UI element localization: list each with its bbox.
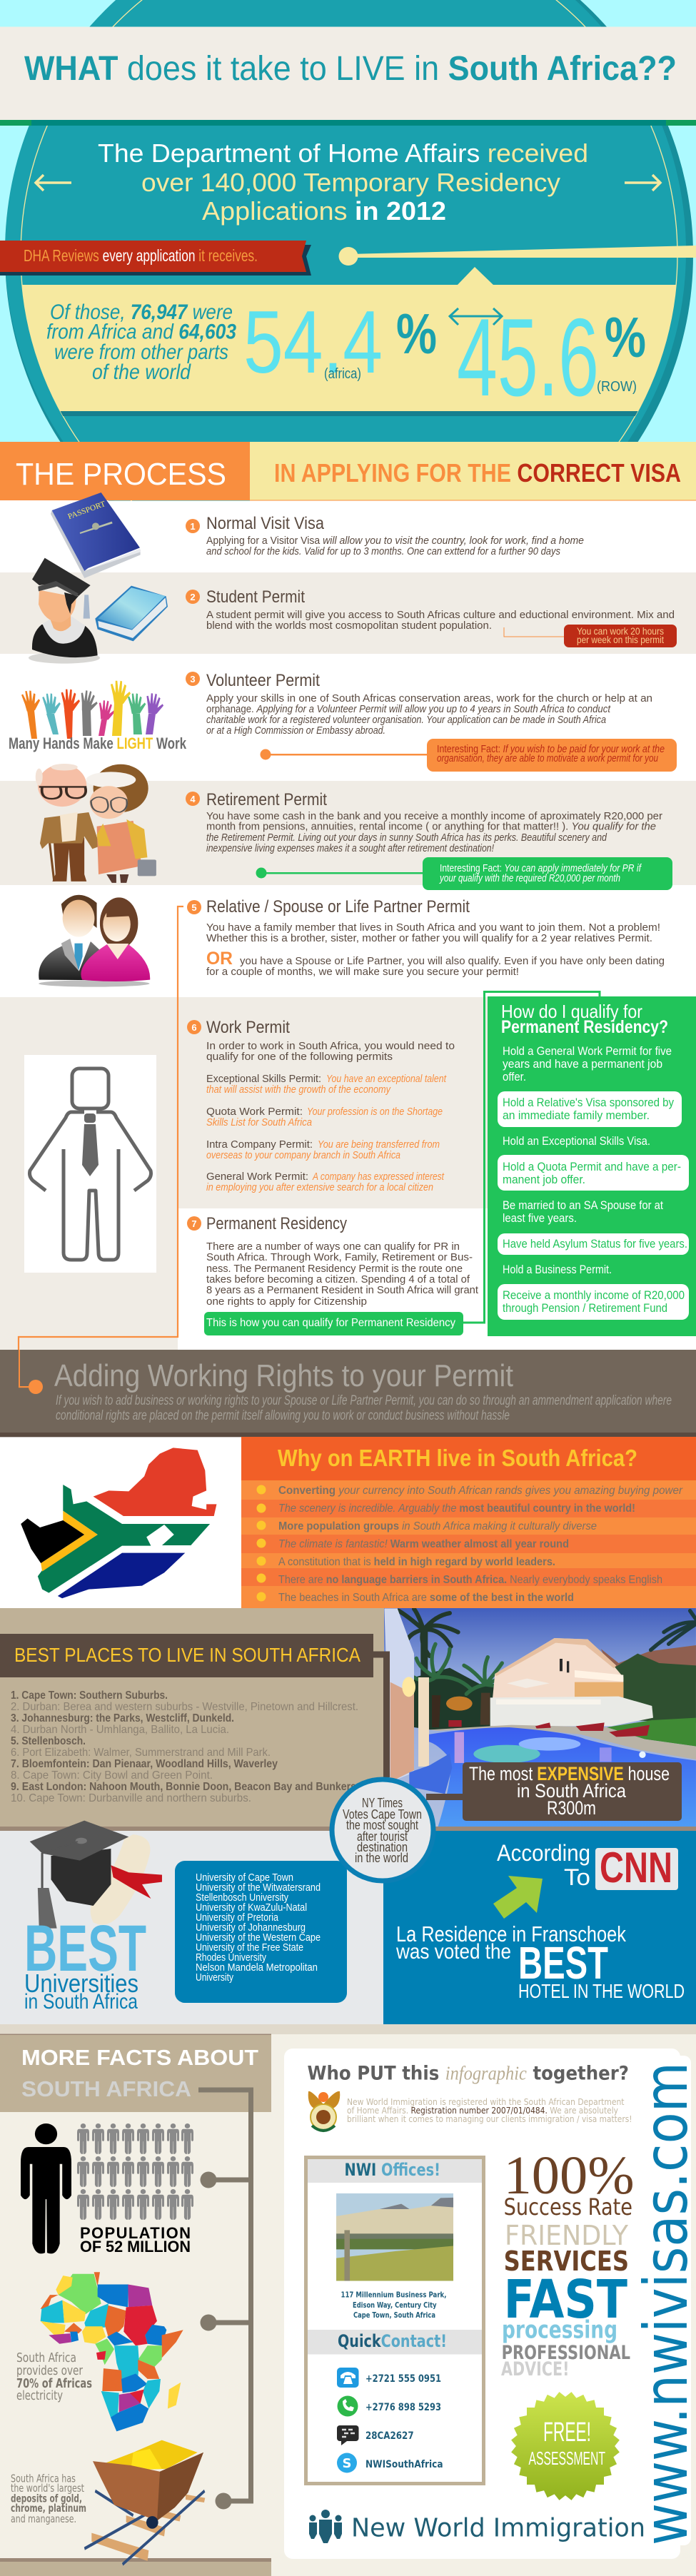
body (206, 535, 584, 557)
heading: Retirement Permit (206, 790, 327, 809)
university list: University of Pretoria (196, 1911, 279, 1924)
text: of those (46, 300, 236, 384)
callout: NY Times: in the world (355, 1851, 408, 1865)
map: africa (41, 2272, 183, 2431)
wordmark: service claims: FAST (504, 2269, 627, 2330)
list: 6. Port Elizabeth: Walmer, Summerstrand and Mill Park. (11, 1747, 271, 1759)
item: exceptional skills: Hold an Exceptional Skills Visa. (503, 1134, 650, 1148)
body: A student permit will give you access to South Africas culture and eductional environment. Mix and (206, 609, 675, 621)
badge 6: 6 (191, 1022, 197, 1033)
label: most expensive house (426, 1762, 682, 1821)
chart: population: POPULATION (80, 2224, 191, 2242)
chart: population: OF 52 MILLION (80, 2238, 191, 2256)
text: la residence: was voted the (395, 1940, 511, 1964)
text: address (341, 2290, 447, 2320)
body: Quota Work Permit: (206, 1106, 303, 1118)
badge 6 (187, 1020, 201, 1034)
body: General Work Permit: (206, 1171, 308, 1183)
step 3: volunteer permit (186, 671, 677, 772)
chart: population (21, 2123, 193, 2256)
text: la residence (395, 1921, 685, 2002)
item: general work permit: offer. (503, 1070, 526, 1084)
badge 4 (186, 792, 200, 806)
panel: statistics (0, 267, 696, 419)
title: WHAT does it take to LIVE in South Africa?? (24, 50, 677, 88)
callout: interesting fact retirement (256, 857, 672, 890)
heading: MORE FACTS ABOUT (21, 2045, 258, 2070)
callout: NY Times: NY Times (362, 1796, 403, 1810)
contact: skype: S (343, 2456, 351, 2471)
headline text (98, 138, 588, 226)
body (206, 1040, 455, 1193)
body: In order to work in South Africa, you would need to (206, 1040, 455, 1052)
item: relative's visa (498, 1091, 682, 1127)
panel heading (501, 1001, 668, 1037)
body: Whether this is a brother, sister, mother or father you will qualify for a 2 year relatives Permit. (206, 932, 652, 944)
heading: Volunteer Permit (206, 671, 320, 690)
university list: University (196, 1971, 233, 1984)
stat: africa: % (396, 302, 437, 365)
badge 7: 7 (191, 1218, 197, 1229)
heading: quick contact (308, 2330, 482, 2354)
text: mineral deposits: chrome, platinum (11, 2502, 86, 2515)
text: of those: from Africa and 64,603 (46, 320, 236, 344)
headline text: over 140,000 Temporary Residency (141, 168, 560, 197)
university list: University of the Witwatersrand (196, 1882, 321, 1894)
heading: SOUTH AFRICA (21, 2076, 191, 2101)
body: Skills List for South Africa (206, 1116, 312, 1128)
body: overseas to your company branch in South Africa (206, 1149, 400, 1161)
arrow: green (493, 1876, 543, 1919)
list (11, 1689, 375, 1804)
icon: worker figure (24, 1055, 156, 1273)
body: Your profession is on the Shortage (307, 1106, 443, 1118)
body: 8 years as a Permanent Resident in South Africa will grant (206, 1284, 479, 1296)
wordmark: service claims: PROFESSIONAL (502, 2342, 630, 2364)
body (206, 810, 662, 854)
reason 1: Converting your currency into South African rands gives you amazing buying power (278, 1485, 683, 1497)
step 5: relative permit (187, 897, 665, 978)
panel: who put this together (284, 2049, 696, 2559)
text: according to (497, 1840, 590, 1890)
callout: how to qualify (204, 1312, 463, 1335)
step 4: retirement permit (186, 790, 672, 890)
text: address: 117 Millennium Business Park, (341, 2290, 447, 2300)
step 6: work permit (187, 1018, 455, 1193)
panel: more facts (0, 2034, 271, 2576)
logo: CNN: CNN (600, 1844, 672, 1891)
panel: according to CNN (383, 1831, 696, 2024)
university list: University of the Western Cape (196, 1931, 321, 1944)
text: according to: To (564, 1864, 590, 1890)
text: according to: According (497, 1840, 590, 1866)
icon: many hands make light work: Many Hands Make LIGHT Work (9, 734, 187, 752)
callout: NY Times: after tourist (357, 1829, 408, 1844)
body: for a couple of months, we will make sure you secure your permit! (206, 966, 519, 978)
text: registration: of Home Affairs. Registration number 2007/01/0484. We are absolutely (347, 2105, 619, 2116)
headline text: The Department of Home Affairs received (98, 138, 588, 168)
arrow: double (450, 308, 502, 325)
item: quota permit: Hold a Quota Permit and have a per- (503, 1160, 681, 1173)
contact: skype: NWISouthAfrica (365, 2459, 443, 2470)
heading: Student Permit (206, 587, 305, 607)
list: 7. Bloemfontein: Dan Pienaar, Woodland Hills, Waverley (11, 1758, 278, 1770)
body (206, 1241, 479, 1308)
icon: gold mine cart (84, 2440, 205, 2565)
icon: passport: PASSPORT (67, 500, 107, 521)
item: monthly income (498, 1284, 689, 1320)
item: quota permit (498, 1155, 689, 1191)
badge 1: 1 (190, 521, 196, 532)
photo: expensive house (378, 1606, 696, 1832)
panel: adding working rights (0, 1350, 696, 1438)
item: general work permit: Hold a General Work Permit for five (503, 1044, 672, 1058)
body: You have some cash in the bank and you receive a monthly income of aproximately R20,000 per (206, 810, 662, 822)
heading (24, 1912, 146, 2014)
heading (21, 2045, 258, 2101)
ribbon: DHA reviews (0, 241, 311, 276)
list: 8. Cape Town: City Bowl and Green Point. (11, 1769, 213, 1782)
text: electricity: South Africa (16, 2350, 76, 2365)
body: Intra Company Permit: (206, 1138, 313, 1151)
university list (175, 1861, 347, 2003)
body: You have a family member that lives in South Africa and you want to join them. Not a problem! (206, 921, 660, 934)
reason 2: The scenery is incredible. Arguably the most beautiful country in the world! (278, 1502, 635, 1515)
body: month from pensions, annuities, rental income ( or anything for that matter!! ). You qualify for the (206, 821, 656, 832)
badge 4: 4 (190, 794, 196, 804)
text: mineral deposits: deposits of gold, (11, 2492, 82, 2505)
icon: passport (51, 493, 141, 578)
panel heading: Permanent Residency? (501, 1017, 668, 1037)
callout: how to qualify: This is how you can qualify for Permanent Residency (206, 1317, 455, 1329)
heading: BEST PLACES TO LIVE IN SOUTH AFRICA (14, 1644, 360, 1666)
step 7: permanent residency (187, 1214, 479, 1335)
contact: whatsapp (337, 2395, 441, 2417)
label: most expensive house: R300m (547, 1797, 596, 1819)
reason 6: There are no language barriers in South Africa. Nearly everybody speaks English (278, 1574, 662, 1586)
item: relative's visa: an immediate family member. (503, 1108, 650, 1122)
badge: free assessment: ASSESSMENT (528, 2448, 605, 2469)
panel: why on earth (241, 1437, 696, 1608)
badge 2 (186, 590, 200, 604)
list: 4. Durban North - Umhlanga, Ballito, La Lucia. (11, 1724, 229, 1736)
pin bar (338, 246, 696, 266)
wordmark: service claims: SERVICES (504, 2246, 629, 2277)
text: electricity: provides over (16, 2363, 83, 2378)
body: in employing you after extensive search for a local citizen (206, 1181, 433, 1193)
contact: whatsapp: +2776 898 5293 (365, 2402, 441, 2413)
wordmark: service claims: Success Rate (504, 2193, 632, 2221)
stat: africa: 54.4 (243, 293, 383, 392)
stat: rest of world: % (605, 305, 646, 369)
panel: row backgrounds (0, 501, 696, 1350)
body: There are a number of ways one can qualify for PR in (206, 1241, 460, 1253)
heading (308, 2159, 482, 2183)
heading: Relative / Spouse or Life Partner Permit (206, 897, 470, 916)
contact: phone: +2721 555 0951 (365, 2373, 441, 2385)
heading: Permanent Residency (206, 1214, 347, 1233)
text: address: Cape Town, South Africa (353, 2310, 435, 2320)
list: 3. Johannesburg: the Parks, Westcliff, Dunkeld. (11, 1712, 234, 1724)
icon: coat of arms (308, 2091, 340, 2131)
university list: Nelson Mandela Metropolitan (196, 1961, 318, 1974)
item: quota permit: manent job offer. (503, 1173, 585, 1186)
panel heading: How do I qualify for (501, 1001, 642, 1022)
callout: interesting fact retirement: Interesting Fact: You can apply immediately for PR if (440, 863, 642, 874)
heading: the process: THE PROCESS (16, 457, 226, 492)
arrow: left (36, 175, 71, 191)
stat: rest of world: (ROW) (597, 379, 637, 395)
body: one rights to apply for Citizenship (206, 1295, 367, 1308)
text: electricity: electricity (16, 2388, 63, 2403)
callout: NY Times: the most sought (346, 1818, 418, 1832)
connector: house (373, 1655, 387, 1777)
list: 10. Cape Town: Durbanville and northern suburbs. (11, 1792, 251, 1804)
badge 3 (186, 672, 200, 686)
panel: hero header (0, 0, 696, 501)
body: Exceptional Skills Permit: (206, 1073, 321, 1085)
body: the Retirement Permit. Living out your days in sunny South Africa has its perks. Beautiful scenery and (206, 832, 607, 844)
panel: best places (0, 1608, 384, 1827)
body: ness. The Permanent Residency Permit is the route one (206, 1263, 463, 1275)
badge 2: 2 (190, 592, 196, 602)
list: 2. Durban: Berea and western suburbs - Westville, Pinetown and Hillcrest. (11, 1701, 358, 1713)
headline text: Applications in 2012 (202, 196, 446, 226)
university list: University of KwaZulu-Natal (196, 1901, 307, 1914)
list: 5. Stellenbosch. (11, 1735, 86, 1747)
heading: Work Permit (206, 1018, 290, 1037)
text: mineral deposits: South Africa has (11, 2473, 76, 2485)
connector: orange process line (19, 906, 183, 1387)
reason 7: The beaches in South Africa are some of the best in the world (278, 1592, 574, 1604)
contact: phone (337, 2368, 441, 2388)
body: South Africa. Through Work, Family, Retirement or Bus- (206, 1251, 473, 1263)
wordmark: service claims: FRIENDLY (505, 2220, 629, 2251)
pin (29, 1380, 43, 1394)
heading: Why on EARTH live in South Africa? (278, 1445, 637, 1471)
body: that will assist with the growth of the economy (206, 1084, 391, 1096)
heading: in South Africa (24, 1990, 138, 2014)
text: registration: brilliant when it comes to managing our clients immigration / visa matters! (347, 2113, 632, 2124)
text: mineral deposits: and manganese. (11, 2512, 76, 2525)
text: address: Edison Way, Century City (353, 2300, 437, 2310)
badge 5 (187, 900, 201, 914)
item: business permit: Hold a Business Permit. (503, 1263, 612, 1276)
text: of those: were from other parts (54, 340, 228, 364)
body: OR (206, 949, 233, 969)
badge 1 (186, 519, 200, 533)
wordmark: service claims: ADVICE! (501, 2358, 570, 2380)
callout: work hours: per week on this permit (577, 635, 664, 645)
contact: skype (337, 2453, 443, 2473)
bracket connector (198, 2090, 251, 2510)
heading (0, 1634, 373, 1677)
callout: NY Times (330, 1777, 435, 1883)
item: relative's visa: Hold a Relative's Visa sponsored by (503, 1096, 674, 1109)
callout: interesting fact volunteer (260, 739, 677, 772)
body (56, 1393, 672, 1423)
wordmark: service claims (501, 2146, 635, 2380)
icon: elderly couple (36, 764, 156, 883)
panel: how do I qualify (488, 996, 696, 1336)
logo: new world immigration: New World Immigration (351, 2514, 645, 2542)
icon: couple (39, 895, 150, 987)
badge 5: 5 (191, 902, 197, 913)
body: Applying for a Visitor Visa will allow you to visit the country, look for work, find a home (206, 535, 584, 547)
list: 1. Cape Town: Southern Suburbs. (11, 1689, 168, 1702)
strip (0, 1827, 696, 1831)
stat: africa: (africa) (324, 366, 361, 382)
university list: Stellenbosch University (196, 1891, 288, 1904)
panel: NWI offices (306, 2157, 484, 2484)
body (206, 692, 652, 737)
heading: NWI Offices! (344, 2160, 440, 2180)
heading: Universities (24, 1969, 138, 1998)
body: A company has expressed interest (312, 1171, 445, 1183)
body: orphanage. Applying for a Volunteer Permit will allow you up to 4 years in South Africa to conduct (206, 703, 611, 715)
icon: graduate student (29, 558, 168, 664)
body: or at a High Commission or Embassy abroad. (206, 724, 385, 737)
text: registration (347, 2096, 632, 2124)
badge: free assessment: FREE! (543, 2418, 591, 2448)
body: qualify for one of the following permits (206, 1051, 393, 1063)
badge 3: 3 (190, 674, 196, 685)
item: general work permit (503, 1044, 672, 1084)
text: mineral deposits: the world's largest (11, 2482, 84, 2495)
list: 9. East London: Nahoon Mouth, Bonnie Doon, Beacon Bay and Bunkers Hill (11, 1781, 375, 1793)
text: electricity (16, 2350, 92, 2403)
body: You have an exceptional talent (326, 1073, 447, 1085)
callout: work hours (504, 625, 677, 647)
heading: Who PUT this infographic together? (307, 2063, 629, 2084)
callout: NY Times: Votes Cape Town (343, 1807, 422, 1822)
university list: University of Johannesburg (196, 1921, 306, 1934)
wordmark: service claims: 100% (504, 2146, 635, 2206)
body: and school for the kids. Valid for up to 3 months. One can exttend for a further 90 days (206, 545, 560, 557)
heading: Adding Working Rights to your Permit (54, 1358, 513, 1393)
map: south african flag (0, 1437, 241, 1608)
heading: Normal Visit Visa (206, 514, 325, 533)
text: mineral deposits (11, 2473, 86, 2525)
icon: many hands make light work (9, 681, 187, 752)
heading: the process (0, 442, 696, 501)
text: electricity: 70% of Africas (16, 2376, 92, 2391)
body (206, 921, 665, 978)
heading: quick contact: QuickContact! (338, 2331, 447, 2351)
item: married: least five years. (503, 1211, 577, 1225)
label: most expensive house: in South Africa (517, 1780, 627, 1802)
reason 3: More population groups in South Africa making it culturally diverse (278, 1520, 597, 1532)
ribbon: DHA reviews: DHA Reviews every application it receives. (24, 246, 258, 265)
wordmark: service claims: processing (502, 2315, 617, 2344)
badge 7 (187, 1216, 201, 1231)
text: of those: of the world (92, 360, 191, 384)
body: blend with the worlds most cosmopolitan student population. (206, 620, 492, 632)
body: inexpensive living expenses makes it a sought after retirement destination! (206, 842, 495, 854)
university list: University of Cape Town (196, 1872, 293, 1884)
panel: lower background (0, 2024, 696, 2576)
text: of those: Of those, 76,947 were (50, 300, 233, 324)
text: registration: New World Immigration is registered with the South African Department (347, 2096, 625, 2107)
body: takes before becoming a citizen. Spending 4 of a total of (206, 1273, 470, 1286)
body: Apply your skills in one of South Africas conservation areas, work for the church or help at an (206, 692, 652, 704)
callout: interesting fact volunteer: Interesting Fact: If you wish to be paid for your work at the (437, 744, 665, 755)
callout: NY Times: destination (357, 1840, 408, 1854)
reason 4: The climate is fantastic! Warm weather almost all year round (278, 1538, 569, 1550)
university list: University of the Free State (196, 1941, 303, 1954)
callout: work hours: You can work 20 hours (577, 626, 664, 637)
university list: Rhodes University (196, 1951, 266, 1964)
icon: graduation cap and scroll (30, 1821, 162, 1929)
text: la residence: BEST (518, 1937, 608, 1989)
arrow: right (625, 175, 660, 191)
item: married: Be married to an SA Spouse for at (503, 1198, 663, 1212)
body: you have a Spouse or Life Partner, you will also qualify. Even if you have only been dating (240, 955, 665, 967)
body: conditional rights are placed on the permit itself allowing you to work or conduct business without hassle (56, 1408, 510, 1423)
contact: blackberry: 28CA2627 (365, 2430, 414, 2442)
item: monthly income: through Pension / Retirement Fund (503, 1301, 667, 1315)
step 1: normal visit visa (186, 514, 584, 557)
photo: office building (336, 2193, 453, 2281)
contact: blackberry (337, 2425, 414, 2445)
body: charitable work for a registered volunteer organisation. Your application can be made in South Africa (206, 714, 606, 726)
label: most expensive house: The most EXPENSIVE house (469, 1763, 670, 1784)
reason 5: A constitution that is held in high regard by world leaders. (278, 1556, 555, 1568)
badge: free assessment (511, 2392, 620, 2500)
step 2: student permit (186, 587, 677, 647)
body (206, 609, 675, 632)
body: You are being transferred from (318, 1138, 440, 1151)
stat: rest of world: 45.6 (457, 296, 599, 419)
panel: best universities (0, 1821, 383, 2024)
callout: interesting fact retirement: your qualify with the required R20,000 per month (439, 873, 620, 884)
item: general work permit: years and have a permanent job (503, 1057, 662, 1071)
connector: green line (463, 992, 600, 1323)
heading: BEST (24, 1912, 146, 1985)
item: married (503, 1198, 663, 1225)
text: la residence: La Residence in Franschoek (396, 1921, 626, 1946)
item: asylum (498, 1233, 689, 1255)
